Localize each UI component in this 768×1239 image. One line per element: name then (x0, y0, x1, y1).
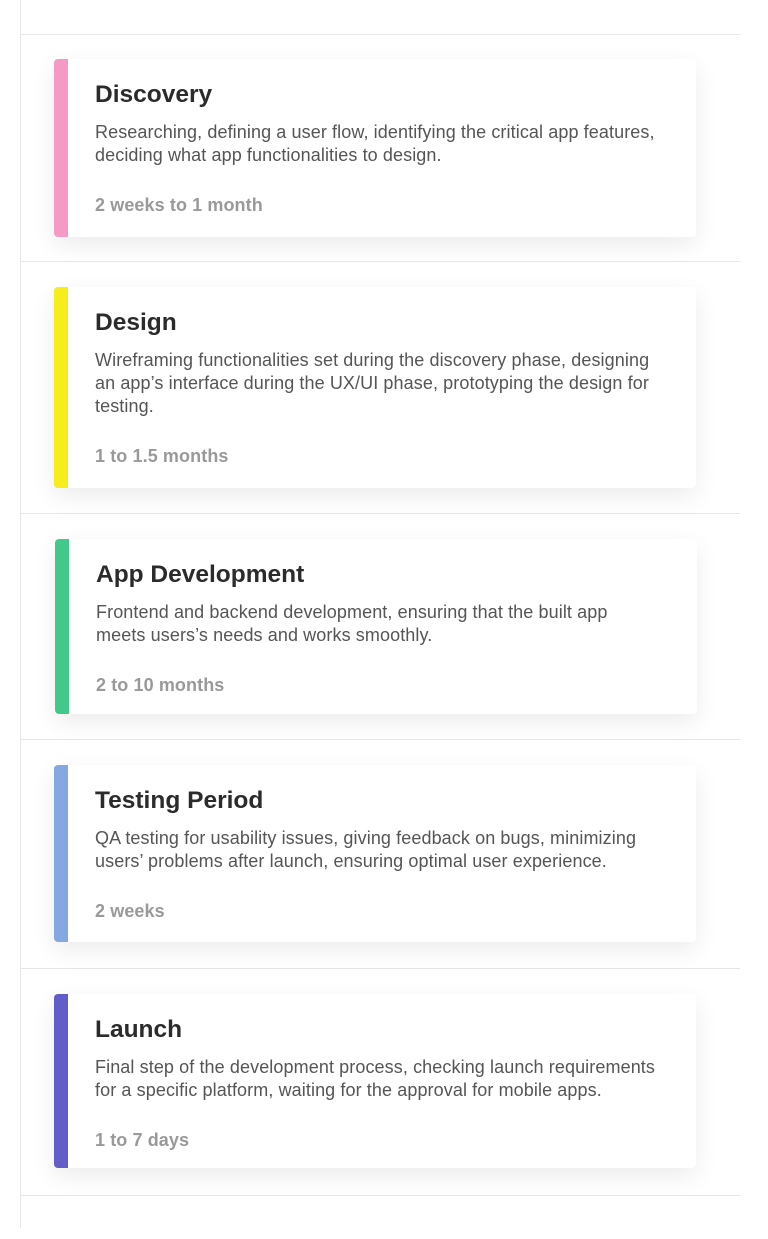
text: launch description (95, 1057, 655, 1100)
panel: testing period (54, 765, 696, 942)
heading: App Development: App Development (96, 561, 304, 588)
heading: Testing Period: Testing Period (95, 787, 263, 814)
bar: purple (54, 994, 68, 1168)
heading: Design: Design (95, 309, 177, 336)
text: launch description: Final step of the development process, checking launch requirements (95, 1057, 655, 1077)
text: testing description: QA testing for usability issues, giving feedback on bugs, minimizing (95, 828, 636, 848)
text: testing description: users’ problems after launch, ensuring optimal user experience. (95, 851, 607, 871)
panel: launch (54, 994, 696, 1168)
text: design description: Wireframing functionalities set during the discovery phase, designing (95, 350, 649, 370)
duration: testing: 2 weeks (95, 901, 165, 921)
text: design description: an app’s interface during the UX/UI phase, prototyping the design for (95, 373, 649, 393)
text: testing description (95, 828, 636, 871)
duration: design: 1 to 1.5 months (95, 446, 229, 466)
panel: app development (55, 539, 697, 714)
text: development description (96, 602, 607, 645)
bar: yellow (54, 287, 68, 488)
panel: discovery (54, 59, 696, 237)
duration: development: 2 to 10 months (96, 675, 224, 695)
text: discovery description: deciding what app functionalities to design. (95, 145, 442, 165)
bar: green (55, 539, 69, 714)
text: development description: meets users’s needs and works smoothly. (96, 625, 432, 645)
text: discovery description: Researching, defining a user flow, identifying the critical app features, (95, 122, 655, 142)
duration: launch: 1 to 7 days (95, 1130, 189, 1150)
heading: Launch: Launch (95, 1016, 182, 1043)
text: discovery description (95, 122, 655, 165)
duration: discovery: 2 weeks to 1 month (95, 195, 263, 215)
text: launch description: for a specific platform, waiting for the approval for mobile apps. (95, 1080, 602, 1100)
text: design description (95, 350, 649, 416)
bar: pink (54, 59, 68, 237)
text: development description: Frontend and backend development, ensuring that the built app (96, 602, 607, 622)
text: design description: testing. (95, 396, 154, 416)
heading: Discovery: Discovery (95, 81, 212, 108)
panel: design (54, 287, 696, 488)
bar: blue (54, 765, 68, 942)
